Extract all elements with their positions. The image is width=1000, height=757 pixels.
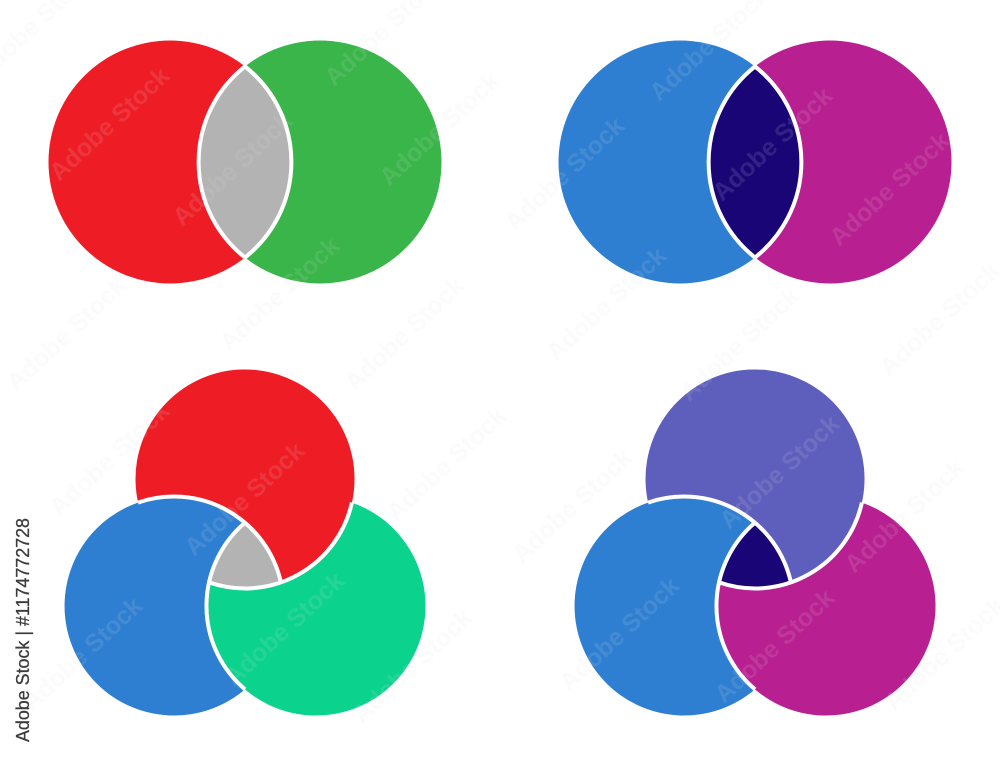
repeated diagonal watermark: Adobe Stock bbox=[674, 282, 805, 406]
repeated diagonal watermark: Adobe Stock bbox=[167, 107, 298, 231]
repeated diagonal watermark: Adobe Stock bbox=[374, 67, 505, 191]
repeated diagonal watermark: Adobe Stock bbox=[541, 242, 672, 366]
circle: green bbox=[198, 40, 442, 284]
circle segment: blue bbox=[65, 496, 245, 716]
vertical stock credit: Adobe Stock | #1174772728 bbox=[13, 518, 33, 742]
repeated diagonal watermark: Adobe Stock bbox=[499, 112, 630, 236]
circle segment: magenta bbox=[717, 503, 936, 716]
repeated diagonal watermark: Adobe Stock bbox=[44, 397, 175, 521]
circle segment: blue bbox=[575, 496, 755, 716]
two-circle Venn: blue and magenta bbox=[558, 40, 952, 284]
circle segment: red bbox=[136, 369, 355, 582]
repeated diagonal watermark: Adobe Stock bbox=[381, 402, 512, 526]
circle: red bbox=[48, 40, 292, 284]
repeated diagonal watermark: Adobe Stock bbox=[554, 572, 685, 696]
repeated diagonal watermark: Adobe Stock bbox=[824, 127, 955, 251]
repeated diagonal watermark: Adobe Stock bbox=[179, 437, 310, 561]
overlap: grey centre bbox=[209, 523, 281, 588]
white separating arcs bbox=[138, 497, 352, 689]
repeated diagonal watermark: Adobe Stock bbox=[839, 454, 970, 578]
three-circle Venn: red, blue and teal bbox=[65, 369, 426, 716]
circle: magenta bbox=[708, 40, 952, 284]
overlap: navy centre bbox=[719, 523, 791, 588]
white separating arcs bbox=[648, 497, 862, 689]
repeated diagonal watermark: Adobe Stock bbox=[507, 444, 638, 568]
repeated diagonal watermark: Adobe Stock bbox=[219, 567, 350, 691]
repeated diagonal watermark: Adobe Stock bbox=[44, 62, 175, 186]
repeated diagonal watermark: Adobe Stock bbox=[347, 604, 478, 728]
repeated diagonal watermark: Adobe Stock bbox=[707, 82, 838, 206]
repeated diagonal watermark: Adobe Stock bbox=[709, 584, 840, 708]
circle segment: purple bbox=[646, 369, 865, 582]
three-circle Venn: purple, blue and magenta bbox=[575, 369, 936, 716]
circle segment: teal bbox=[207, 503, 426, 716]
circle: blue bbox=[558, 40, 802, 284]
repeated diagonal watermark: Adobe Stock bbox=[214, 232, 345, 356]
repeated diagonal watermark: Adobe Stock bbox=[17, 592, 148, 716]
overlap: navy lens bbox=[709, 66, 801, 258]
repeated diagonal watermark: Adobe Stock bbox=[714, 410, 845, 534]
overlap: grey lens bbox=[199, 66, 291, 258]
two-circle Venn: red and green bbox=[48, 40, 442, 284]
repeated diagonal watermark: Adobe Stock bbox=[1, 272, 132, 396]
repeated diagonal watermark: Adobe Stock bbox=[339, 272, 470, 396]
